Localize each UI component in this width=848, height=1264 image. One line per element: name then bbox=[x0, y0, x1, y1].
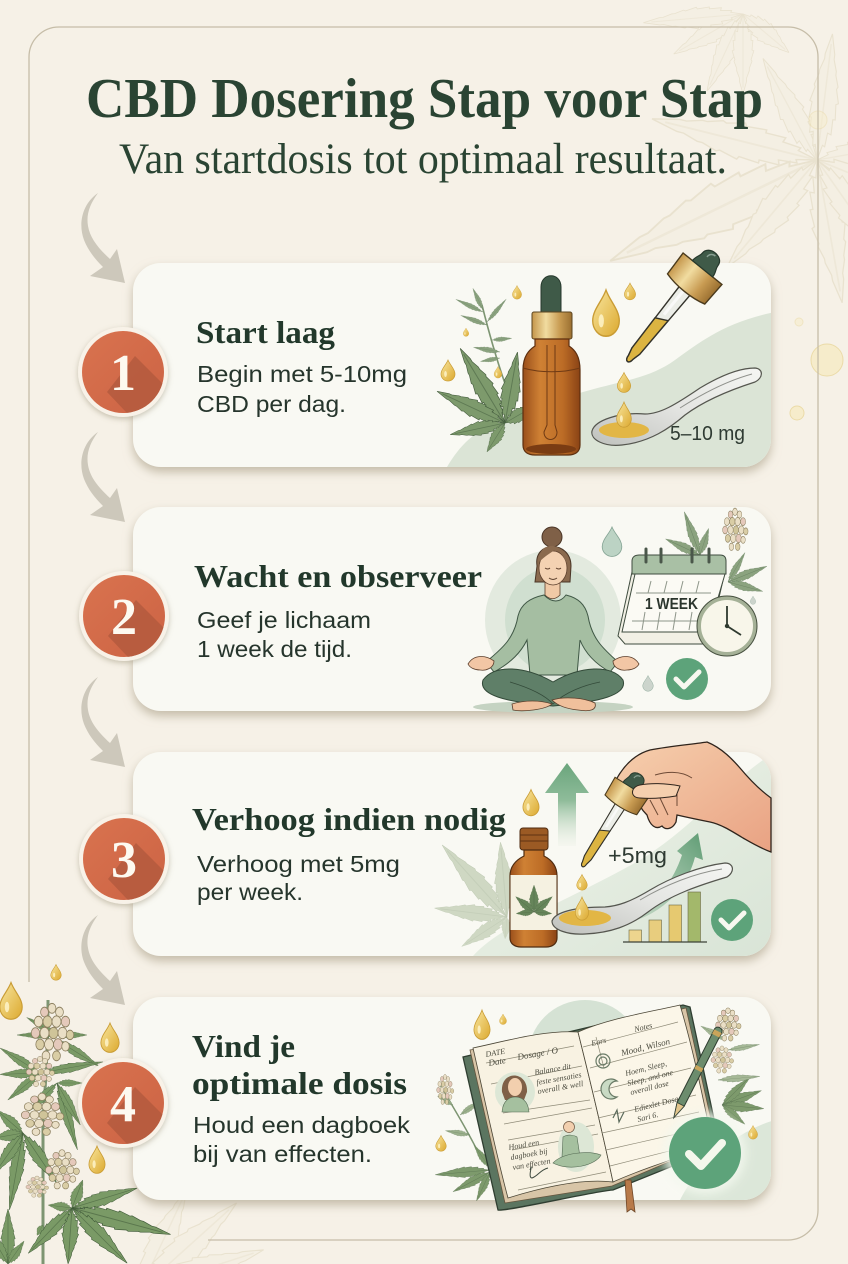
icon: spoon with oil bbox=[552, 863, 732, 934]
step badge 3 bbox=[79, 814, 174, 919]
step 4 heading: Vind je bbox=[192, 1028, 295, 1064]
calendar label: 1 WEEK bbox=[645, 596, 698, 613]
step 4 heading: optimale dosis bbox=[192, 1065, 407, 1101]
journal portrait bbox=[495, 1072, 535, 1112]
step 1 description: Begin met 5-10mg bbox=[197, 361, 407, 387]
panel: step 2 wacht en observeer bbox=[133, 507, 771, 713]
journal left page bbox=[473, 1032, 613, 1198]
arrow: step 3 to 4 bbox=[81, 915, 125, 1005]
step badge 2: 2 bbox=[111, 589, 137, 646]
icon: oil drops bbox=[436, 1010, 758, 1151]
icon: right hemp plant bbox=[699, 1008, 764, 1128]
dose label: 5–10 mg bbox=[670, 423, 745, 445]
journal header text: Hoem, Sleep, bbox=[623, 1059, 668, 1078]
panel: step 4 vind je optimale dosis bbox=[133, 997, 775, 1212]
journal header text: dagboek bij bbox=[510, 1146, 549, 1162]
title: CBD Dosering Stap voor Stap bbox=[86, 68, 763, 130]
arrow: into step 1 bbox=[81, 193, 125, 283]
icon: bottle with label bbox=[510, 828, 557, 947]
step 4 heading bbox=[192, 1028, 407, 1101]
journal header text: Houd een bbox=[507, 1138, 540, 1152]
step badge 2 bbox=[79, 571, 174, 676]
card 2 background bbox=[133, 507, 771, 711]
icon: pen bbox=[670, 1026, 723, 1119]
icon: amber bottle bbox=[523, 276, 580, 455]
step badge 1 bbox=[78, 327, 173, 432]
journal meditation figure bbox=[553, 1122, 601, 1172]
journal header text: Sari 6. bbox=[636, 1110, 659, 1124]
icon: spoon with oil bbox=[592, 368, 761, 445]
step badge 4 bbox=[78, 1058, 173, 1163]
icon: water drops bbox=[602, 527, 756, 691]
journal header text: feste sensaties bbox=[536, 1070, 582, 1087]
journal header text: Ears bbox=[589, 1036, 607, 1048]
icon: label leaf bbox=[513, 885, 555, 917]
journal icons bbox=[596, 1054, 624, 1122]
icon: dropper bbox=[566, 764, 657, 877]
journal header text: Date bbox=[487, 1055, 507, 1068]
icon: hand palm bbox=[612, 742, 771, 852]
step 3 description bbox=[197, 851, 400, 905]
step 4 description: Houd een dagboek bbox=[193, 1112, 411, 1138]
card 4 green accents bbox=[528, 1000, 775, 1205]
journal header text: DATE bbox=[484, 1047, 506, 1059]
journal header text: van effecten bbox=[512, 1156, 551, 1172]
plant leaves bbox=[0, 1014, 173, 1264]
step badge 4: 4 bbox=[110, 1076, 136, 1133]
subtitle: Van startdosis tot optimaal resultaat. bbox=[119, 136, 727, 183]
plant flowers bbox=[21, 1003, 79, 1197]
step 4 description: bij van effecten. bbox=[193, 1141, 372, 1167]
icon: green check bbox=[666, 658, 708, 700]
journal header text: Sleep, and one bbox=[626, 1068, 674, 1088]
dose increment label: +5mg bbox=[608, 843, 667, 868]
card 1 green wave bbox=[447, 312, 775, 470]
journal header text: Dosage / O bbox=[516, 1045, 559, 1062]
arrow: step 2 to 3 bbox=[81, 677, 125, 767]
card 3 background bbox=[133, 752, 771, 956]
journal right page bbox=[578, 1005, 712, 1182]
icon: oil drops bbox=[441, 283, 636, 427]
illustration: hemp plant bottom left bbox=[0, 964, 173, 1264]
bar chart: rising dose bbox=[623, 892, 707, 942]
step 3 description: per week. bbox=[197, 879, 303, 905]
journal header text: Ediexlet Dosage bbox=[632, 1092, 687, 1114]
icon: faded hemp leaf bbox=[434, 838, 517, 952]
icon: meditating woman bbox=[468, 527, 639, 713]
step 1 description: CBD per dag. bbox=[197, 391, 346, 417]
card 4 background bbox=[133, 997, 771, 1200]
journal header text: Notes bbox=[632, 1021, 653, 1034]
icon: signature bbox=[530, 1167, 548, 1178]
step 4 description bbox=[193, 1112, 411, 1167]
step 1 description bbox=[197, 361, 407, 417]
icon: open journal bbox=[463, 1005, 720, 1212]
journal header text bbox=[484, 1021, 687, 1172]
step 2 heading: Wacht en observeer bbox=[194, 558, 482, 594]
step badge 1: 1 bbox=[110, 345, 136, 402]
journal header text: Mood, Wilson bbox=[619, 1036, 671, 1058]
icon: calendar bbox=[618, 549, 726, 644]
step badge 3: 3 bbox=[111, 832, 137, 889]
card 3 green wash bbox=[473, 752, 775, 960]
icon: thumb over dropper bbox=[632, 784, 680, 798]
step 2 description: 1 week de tijd. bbox=[197, 636, 352, 662]
icon: up arrow bbox=[545, 763, 589, 846]
panel: step 3 verhoog indien nodig bbox=[133, 742, 775, 960]
journal header text: overall dose bbox=[629, 1079, 670, 1097]
step 2 description: Geef je lichaam bbox=[197, 607, 371, 633]
icon: oil drops bbox=[523, 790, 589, 920]
journal header text: Balance dit bbox=[534, 1062, 572, 1077]
icon: clock bbox=[697, 596, 757, 656]
arrow: step 1 to 2 bbox=[81, 432, 125, 522]
step 3 heading: Verhoog indien nodig bbox=[192, 801, 506, 837]
step 2 description bbox=[197, 607, 371, 662]
journal ruled lines bbox=[486, 1022, 705, 1190]
icon: hemp leaf bbox=[433, 343, 540, 455]
panel: step 1 start laag bbox=[133, 237, 775, 470]
icon: large check bbox=[664, 1112, 746, 1194]
icon: dropper bbox=[608, 237, 735, 377]
icon: hemp sprig bbox=[455, 287, 512, 392]
journal header text: overall & well bbox=[537, 1079, 585, 1096]
decorative oil bubbles bbox=[790, 111, 843, 420]
icon: left hemp sprig bbox=[435, 1074, 494, 1203]
icon: green check bbox=[711, 899, 753, 941]
icon: hemp leaves behind calendar bbox=[664, 508, 769, 596]
card 1 background bbox=[133, 263, 771, 467]
icon: bookmark ribbon bbox=[625, 1180, 635, 1212]
icon: curved growth arrow bbox=[623, 833, 703, 924]
plant oil drops bbox=[0, 964, 119, 1173]
step 3 description: Verhoog met 5mg bbox=[197, 851, 400, 877]
step 1 heading: Start laag bbox=[196, 314, 335, 350]
